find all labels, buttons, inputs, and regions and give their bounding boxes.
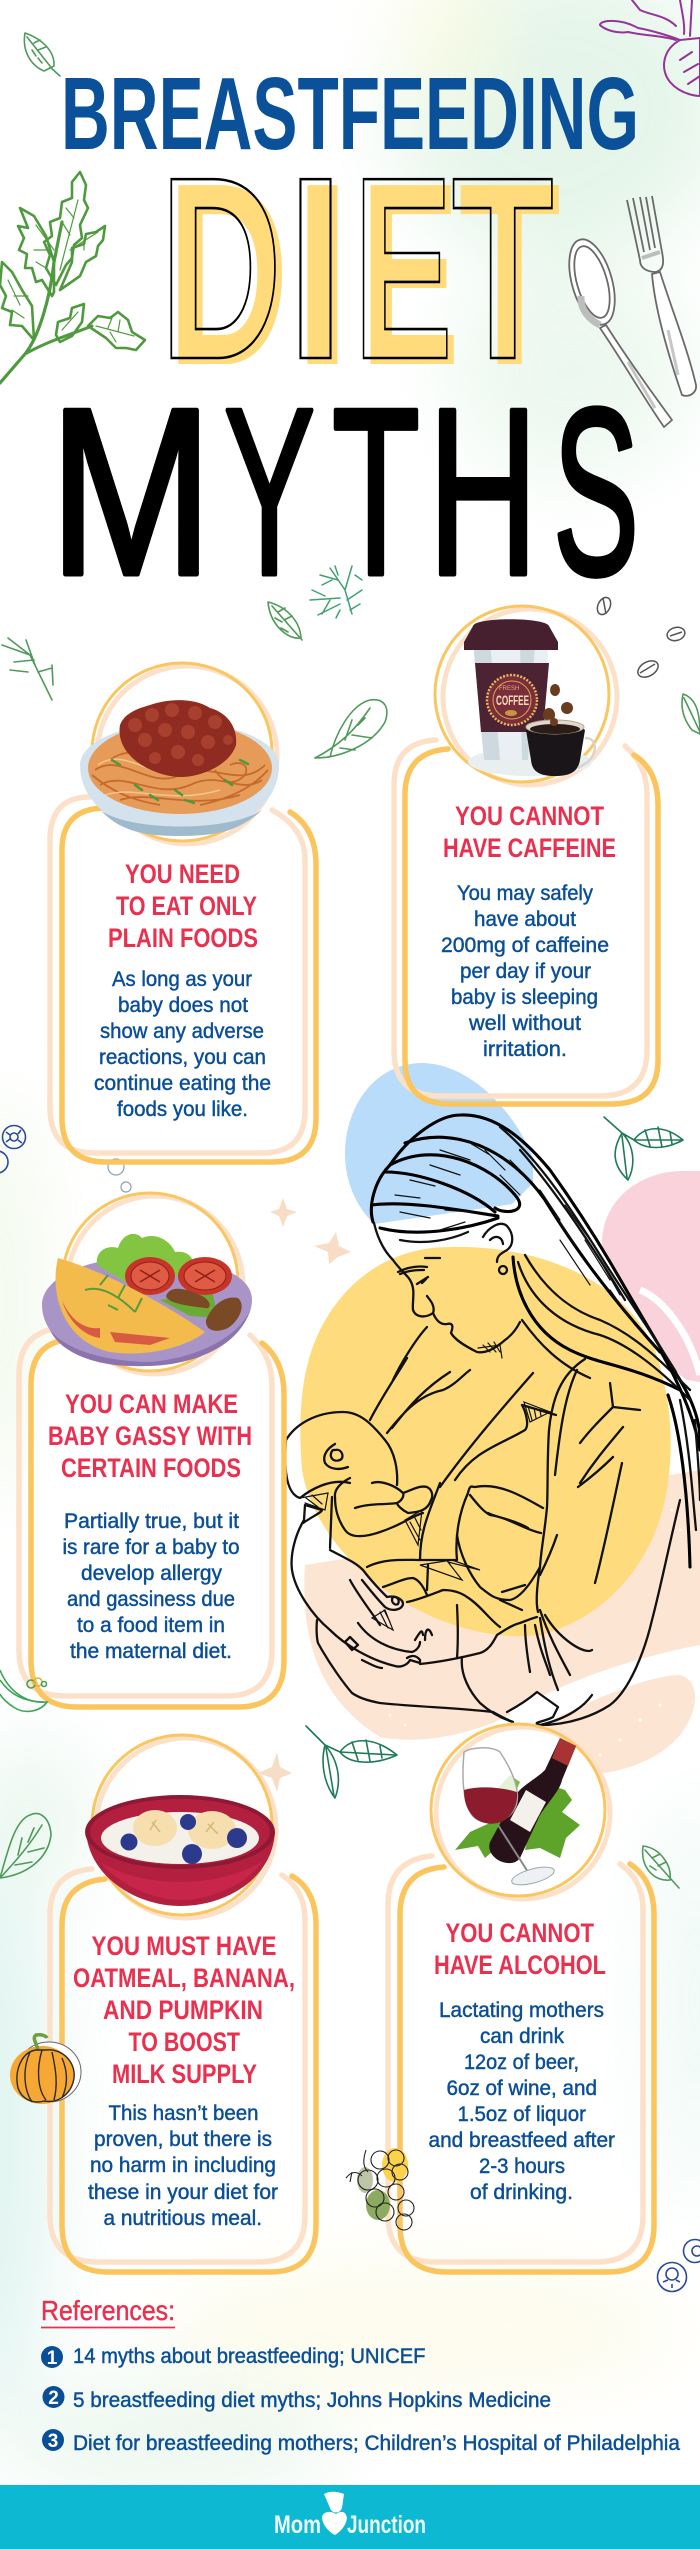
background shapes behind mother [300, 1063, 700, 1775]
reference 1: 14 myths about breastfeeding; UNICEF [73, 2345, 426, 2368]
logo: MomJunction: Mom [274, 2511, 321, 2539]
heading: TO BOOST [128, 2027, 240, 2057]
body text: and gassiness due [67, 1588, 235, 1611]
body text: 6oz of wine, and [446, 2077, 597, 2100]
logo: MomJunction: Junction [347, 2511, 426, 2539]
icon: coffee bean outlines [595, 595, 686, 681]
dome [435, 606, 617, 785]
hair [371, 1115, 700, 1567]
icon: leaf [268, 602, 302, 640]
icon: feather leaf left [0, 1814, 51, 1878]
title line: Diet: D [167, 130, 289, 420]
title line: Diet: D [160, 124, 282, 414]
baby [285, 1412, 432, 1548]
heading: AND PUMPKIN [103, 1995, 263, 2025]
heading [434, 1918, 606, 1980]
panel border: double outline [50, 797, 316, 1162]
body text: 200mg of caffeine [441, 934, 609, 957]
icon: oatmeal bowl [85, 1795, 275, 1906]
title line: Myths [49, 360, 639, 625]
heading: HAVE ALCOHOL [434, 1950, 606, 1980]
heading: TO EAT ONLY [116, 891, 257, 921]
references heading: References: [41, 2295, 175, 2326]
panel: caffeine myth [394, 606, 658, 1104]
icon: blueberries right [658, 2240, 700, 2292]
body text: is rare for a baby to [62, 1536, 240, 1559]
title line: Diet: I [294, 130, 352, 420]
panel border: double outline [394, 740, 658, 1104]
heading: YOU NEED [125, 859, 240, 889]
icon: big herb sprig [0, 172, 145, 383]
icon: coffee cup with beans: COFFEE [496, 692, 529, 708]
icon: feather leaf [315, 700, 387, 758]
face and ear [374, 1223, 520, 1358]
body text: well without [468, 1012, 581, 1035]
body text: these in your diet for [88, 2181, 278, 2204]
panel border: double outline [388, 1856, 654, 2272]
blouse [367, 1327, 640, 1627]
dome [62, 1193, 243, 1374]
body text: baby does not [118, 994, 248, 1017]
icon: leaf right [643, 1846, 679, 1888]
body text: Partially true, but it [64, 1510, 239, 1533]
heading [48, 1389, 252, 1483]
body text: show any adverse [100, 1020, 264, 1043]
heading: YOU CAN MAKE [65, 1389, 238, 1419]
heading: PLAIN FOODS [108, 923, 258, 953]
body text [94, 968, 271, 1121]
reference 3: Diet for breastfeeding mothers; Children’s Hospital of Philadelphia [73, 2432, 680, 2455]
body text: proven, but there is [94, 2128, 272, 2151]
title line: Diet: E [361, 130, 460, 420]
hands and arms [292, 1500, 680, 1725]
title line: Myths: H [428, 360, 538, 625]
heading: YOU CANNOT [446, 1918, 594, 1948]
body text: of drinking. [470, 2181, 573, 2204]
icon: leaf branch centre [306, 1726, 397, 1798]
body text: 1.5oz of liquor [458, 2103, 586, 2126]
title line: Diet: E [354, 124, 453, 414]
panel: alcohol myth [388, 1724, 654, 2272]
body text [88, 2102, 278, 2230]
body text: can drink [480, 2025, 564, 2048]
body text: irritation. [483, 1038, 567, 1061]
icon: pumpkin [10, 2035, 81, 2104]
heading [73, 1931, 295, 2089]
icon: leaf branch right [604, 1117, 683, 1180]
body text: You may safely [457, 882, 593, 905]
dome [431, 1724, 610, 1899]
heading: YOU CANNOT [455, 801, 604, 831]
reference 1: 1 [47, 2348, 58, 2369]
icon: beetroot [600, 0, 700, 96]
body text: As long as your [112, 968, 252, 991]
body text: foods you like. [117, 1098, 248, 1121]
panel border: double outline [50, 1869, 316, 2272]
title line: Myths: T [332, 360, 420, 625]
body text [62, 1510, 240, 1663]
body text: Lactating mothers [439, 1999, 604, 2022]
reference 3: 3 [48, 2431, 58, 2452]
references [41, 2295, 680, 2455]
body text: a nutritious meal. [104, 2207, 262, 2230]
body text [428, 1999, 615, 2204]
heading [108, 859, 258, 953]
title line: Diet [160, 124, 561, 420]
panel: gassy foods myth [19, 1193, 284, 1707]
logo: MomJunction [274, 2492, 426, 2539]
icon: sparkles [258, 1198, 351, 1792]
body text: per day if your [460, 960, 591, 983]
icon: pea pod [0, 1670, 47, 1711]
body text: and breastfeed after [428, 2129, 615, 2152]
title line: Diet: T [452, 124, 554, 414]
icon: small leaf top left [24, 33, 60, 76]
heading: HAVE CAFFEINE [443, 833, 616, 863]
dome [92, 1735, 276, 1918]
body text: This hasn’t been [108, 2102, 258, 2125]
body text: 12oz of beer, [464, 2051, 579, 2074]
reference 2: 2 [48, 2388, 59, 2409]
panel border: double outline [19, 1328, 284, 1707]
title line: Diet: I [286, 124, 344, 414]
body text: 2-3 hours [479, 2155, 565, 2178]
body text: the maternal diet. [70, 1640, 232, 1663]
body text: baby is sleeping [451, 986, 598, 1009]
body text [441, 882, 609, 1061]
icon: coffee cup with beans [464, 619, 595, 776]
footer band [0, 2485, 700, 2549]
icon: omelette plate [42, 1234, 252, 1366]
title line: Myths: Y [224, 360, 315, 625]
body text: develop allergy [81, 1562, 222, 1585]
panel: oatmeal banana pumpkin myth [50, 1735, 316, 2272]
heading: YOU MUST HAVE [92, 1931, 276, 1961]
reference 2: 5 breastfeeding diet myths; Johns Hopkins Medicine [73, 2389, 551, 2412]
heading: BABY GASSY WITH [48, 1421, 252, 1451]
dome [92, 663, 277, 844]
body text: to a food item in [77, 1614, 225, 1637]
icon: grapes [346, 2148, 414, 2230]
title line: Diet: T [459, 130, 561, 420]
icon: blueberries left [0, 1126, 26, 1173]
body text: reactions, you can [99, 1046, 266, 1069]
panel: plain foods myth [50, 663, 316, 1162]
heading [443, 801, 616, 863]
icon: spoon and fork [561, 196, 696, 427]
icon: dill sprig [2, 638, 53, 700]
icon: bubbles [108, 1159, 131, 1192]
icon: leaf right edge [682, 694, 700, 734]
illustration: mother breastfeeding baby [285, 1115, 700, 1725]
body text: no harm in including [90, 2154, 276, 2177]
title line: Myths: M [49, 360, 213, 625]
body text: continue eating the [94, 1072, 271, 1095]
icon: dill cluster [310, 566, 362, 618]
heading: OATMEAL, BANANA, [73, 1963, 295, 1993]
icon: wine glass and bottle [455, 1738, 580, 1888]
heading: CERTAIN FOODS [61, 1453, 241, 1483]
title [49, 56, 639, 625]
icon: spaghetti bowl [80, 700, 279, 836]
body text: have about [474, 908, 576, 931]
icon: coffee cup with beans: FRESH [499, 686, 519, 692]
heading: MILK SUPPLY [112, 2059, 257, 2089]
